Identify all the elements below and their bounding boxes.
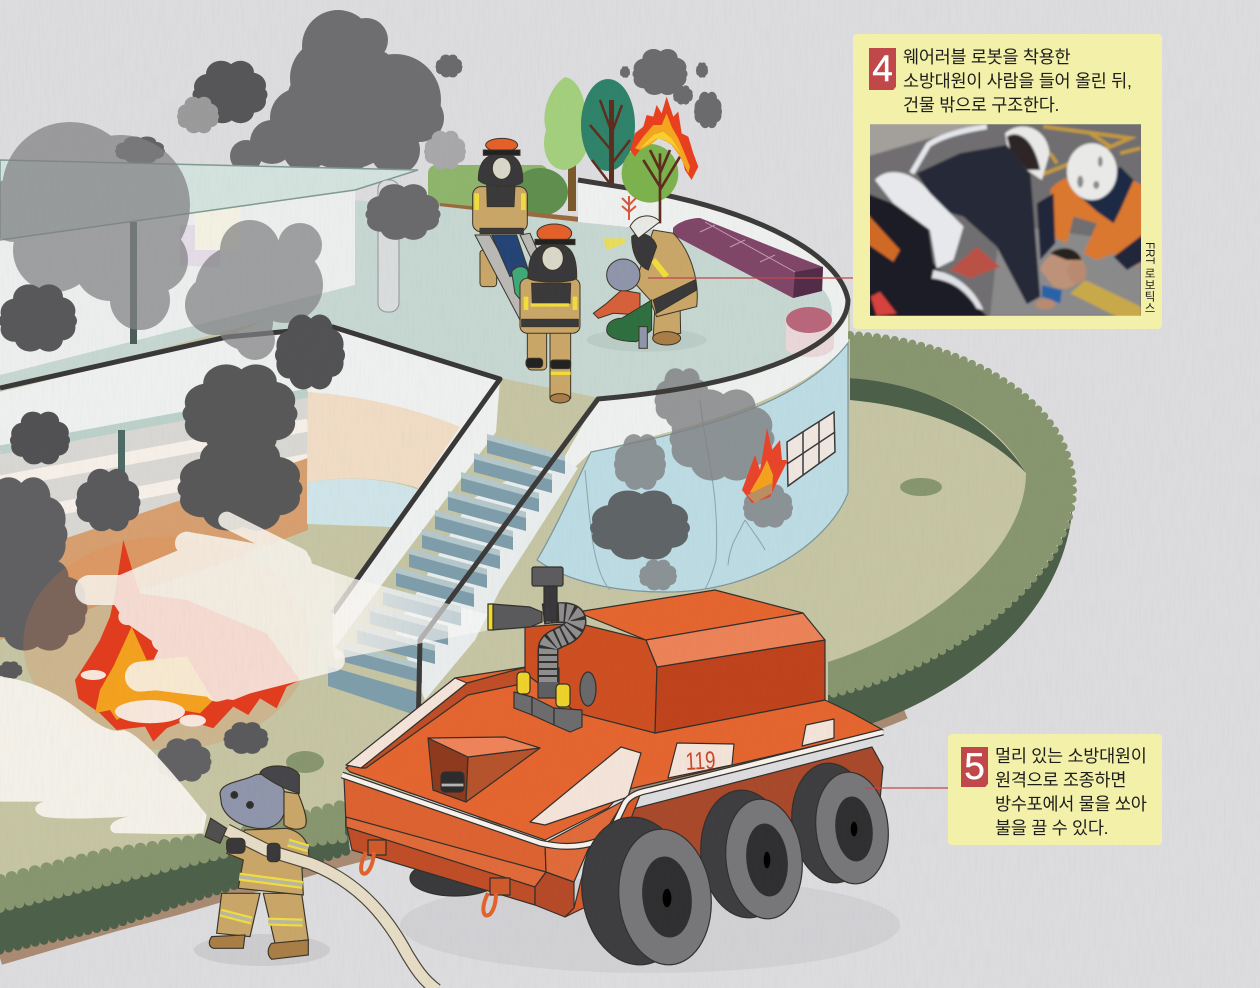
far pavement	[870, 124, 980, 157]
background planting	[428, 165, 640, 232]
exoskeleton waist	[875, 172, 963, 268]
helmet vents	[1077, 156, 1103, 189]
panel: step 5 robot water cannon	[948, 734, 1162, 845]
boots	[209, 935, 245, 948]
lower side panel	[565, 795, 640, 917]
burning tree	[622, 97, 698, 223]
small smoke on lawn	[224, 722, 268, 754]
curb along the road	[0, 712, 905, 958]
corner facet	[535, 872, 574, 917]
lower hedge: dark side	[0, 810, 350, 950]
road shadow under firefighter	[194, 934, 330, 966]
victim	[1040, 250, 1084, 289]
tree: dark green	[581, 79, 635, 218]
ground fire	[23, 537, 310, 750]
main rescuer helmet	[1005, 127, 1050, 180]
smoke over roof back	[115, 137, 165, 163]
rim stroke	[342, 732, 883, 846]
text block 4: 소방대원이 사람을 들어 올린 뒤,	[903, 71, 1132, 91]
coat	[227, 828, 309, 895]
terrace outer rail	[418, 180, 848, 735]
text block 4: 건물 밖으로 구조한다.	[903, 95, 1059, 115]
white wall beside stairs	[333, 385, 498, 650]
lower road	[990, 223, 1141, 316]
nozzle	[205, 818, 227, 843]
ear flap	[284, 792, 306, 829]
interior light stripes	[0, 425, 308, 520]
reflective stripes	[221, 843, 308, 923]
smoke small left	[10, 412, 70, 464]
terrace wall	[540, 180, 848, 500]
stair side wall	[395, 455, 578, 700]
smoke large left edge	[0, 477, 87, 651]
left building	[0, 160, 500, 650]
left leg	[217, 893, 260, 937]
upper floor room	[0, 190, 355, 375]
red stretcher	[950, 247, 1000, 278]
tree trunk	[643, 150, 680, 223]
room cream block	[195, 205, 240, 250]
lidar sensor	[441, 772, 464, 792]
hippo firefighter	[205, 766, 437, 988]
front wheel face	[612, 825, 718, 969]
small white panel	[802, 719, 834, 746]
orange belt	[867, 213, 900, 262]
main rescuer jacket	[917, 145, 1040, 304]
text block 5: 멀리 있는 소방대원이	[995, 746, 1147, 766]
firefighter water jet	[0, 677, 207, 834]
text block 5: 불을 끌 수 있다.	[995, 818, 1108, 838]
text block 5: 원격으로 조종하면	[995, 770, 1126, 790]
underbody wheel	[410, 860, 500, 896]
road	[867, 121, 1144, 319]
hatch top	[428, 737, 540, 757]
rear wheel back	[786, 759, 878, 887]
ring hedge dark far side	[850, 378, 1026, 473]
yellow light left	[517, 672, 530, 694]
smoke far left small	[0, 661, 22, 679]
wall fire	[742, 428, 788, 503]
hippo head	[220, 774, 286, 828]
smoke dark tall upper	[182, 364, 298, 456]
turret stem	[544, 585, 557, 621]
curb yellow	[1070, 280, 1141, 319]
stretcher with patient	[475, 233, 540, 320]
badge 4: 4	[872, 48, 893, 89]
ring hedge outer scallops	[828, 335, 1073, 695]
front wheel hub	[639, 855, 695, 939]
small smoke	[436, 54, 462, 78]
flames orange	[635, 113, 690, 173]
grey disc	[580, 672, 596, 706]
helmet inner	[1007, 134, 1040, 170]
leader line: panel 4	[648, 277, 853, 279]
smoke behind nozzle spray	[156, 738, 212, 782]
dark smoke on wall	[590, 490, 690, 560]
left dark railing	[0, 327, 500, 613]
terrace floor	[227, 200, 838, 398]
lower hedge: top surface	[0, 805, 345, 908]
small red plant	[622, 196, 636, 220]
small bush near firefighter	[286, 751, 324, 773]
turret hose ribs	[543, 612, 576, 682]
smoke on wall	[614, 368, 793, 590]
red exo part	[871, 292, 897, 316]
bumper light band	[346, 817, 546, 887]
room furniture	[180, 225, 220, 268]
road lines	[1037, 127, 1140, 177]
orange floor	[0, 458, 308, 640]
flames red	[630, 97, 698, 180]
nozzle barrel	[492, 604, 542, 630]
119 panel	[668, 743, 734, 778]
stool	[786, 307, 834, 357]
lawn	[0, 300, 1045, 882]
box light strip	[646, 613, 825, 667]
text block 4: 웨어러블 로봇을 착용한	[903, 47, 1070, 67]
glass column	[378, 180, 399, 312]
glass roof	[0, 160, 418, 240]
smoke right of column	[366, 184, 440, 240]
smoke dark cloud	[192, 61, 268, 123]
front wheel axle	[662, 888, 672, 908]
curved blue wall	[537, 343, 848, 592]
rear wheel hub	[833, 795, 875, 863]
firefighter one	[473, 138, 527, 287]
text block 4	[903, 47, 1132, 115]
gloves	[227, 838, 245, 853]
helmet strap	[260, 766, 299, 793]
translucent smoke centre	[185, 220, 323, 360]
rescuer knee	[1037, 193, 1055, 260]
smoke pale puff	[177, 97, 219, 133]
smoke dark tall lower	[178, 439, 302, 531]
turret neck	[538, 668, 559, 698]
tow hook right	[483, 878, 510, 916]
main rescuer lower body	[867, 193, 990, 319]
photo: rescue with wearable robot	[870, 124, 1141, 316]
hose fill	[227, 830, 437, 988]
thin column	[130, 222, 137, 344]
blue arched room	[307, 479, 423, 527]
firefighter three crouching	[603, 216, 697, 345]
rescuer hand	[1035, 299, 1055, 309]
rear wheel face	[810, 769, 894, 887]
smoke dark left	[0, 284, 77, 352]
firefighter two	[520, 224, 580, 403]
room slab	[0, 285, 355, 392]
tree crown	[622, 144, 678, 203]
middle wheel hub	[743, 822, 791, 898]
water blobs	[81, 670, 206, 727]
orange rescuer	[1050, 173, 1144, 267]
lower interior	[0, 392, 308, 560]
text block 5	[995, 746, 1147, 838]
staircase	[328, 434, 565, 716]
box right face	[655, 640, 825, 733]
panel: step 4 wearable robot	[853, 34, 1162, 329]
leader line: panel 5	[865, 787, 948, 789]
ring hedge	[828, 335, 1073, 737]
left trim	[361, 667, 526, 768]
rescuer helmet	[1067, 143, 1117, 200]
badge 5: 5	[964, 746, 985, 787]
hull top	[346, 667, 883, 840]
hatch side	[466, 748, 540, 802]
yellow flames	[95, 627, 213, 720]
robot firefighting vehicle	[342, 567, 894, 970]
exoskeleton arm	[912, 127, 987, 173]
hose in hand	[227, 830, 437, 988]
red flames	[75, 540, 300, 742]
side skirt	[590, 747, 883, 900]
box left face	[525, 623, 657, 733]
stripe centre	[221, 843, 308, 923]
right white stripe	[530, 747, 641, 825]
smoke top cluster	[230, 10, 444, 175]
text block 5: 방수포에서 물을 쏘아	[995, 794, 1147, 814]
bench	[673, 218, 823, 298]
turret hose	[543, 612, 576, 682]
photo credit: FRT 로보틱스	[1143, 242, 1155, 313]
jet beam near robot	[333, 572, 490, 660]
window	[787, 412, 835, 486]
hatch front	[428, 738, 468, 802]
flames yellow	[640, 132, 682, 155]
ring hedge top surface	[828, 335, 1073, 695]
translucent smoke over glass building	[0, 122, 190, 330]
fire glow	[23, 537, 310, 750]
left white stripe	[346, 678, 467, 768]
lower white wall	[0, 327, 500, 450]
front wheel back	[575, 812, 697, 970]
tow hook left	[361, 840, 386, 874]
rescue firefighters group	[473, 138, 707, 403]
nozzle tip	[488, 604, 493, 630]
tree: light green	[544, 77, 589, 211]
box top face	[577, 590, 803, 640]
smoke small middle	[76, 469, 140, 531]
exoskeleton thigh	[932, 270, 983, 310]
hand on head	[1068, 260, 1086, 284]
right leg	[263, 893, 308, 943]
front face	[344, 778, 546, 872]
lower thin column	[118, 430, 125, 490]
small bush on the lawn	[900, 478, 942, 496]
smoke dark centre	[275, 315, 345, 389]
middle wheel axle	[763, 851, 771, 869]
119 number: 119	[685, 746, 716, 776]
middle wheel face	[720, 795, 808, 923]
middle wheel back	[695, 786, 795, 922]
turret camera	[532, 567, 563, 586]
peach wall	[307, 392, 460, 490]
side facet	[545, 800, 625, 882]
wall cracks	[585, 400, 765, 590]
rescuer lower leg	[1114, 233, 1144, 270]
rear wheel axle	[850, 821, 858, 837]
bumper lower	[346, 823, 546, 905]
green slab	[0, 393, 308, 450]
ring hedge dark near side	[828, 495, 1073, 737]
turret base blocks	[514, 692, 582, 732]
rescuer dark vest	[1080, 167, 1134, 223]
jet spray body and fingers	[90, 520, 334, 700]
hippo nostrils	[231, 792, 253, 808]
neck brace	[1042, 285, 1062, 303]
rescued hippo	[593, 259, 652, 348]
smoke above trees	[620, 49, 722, 128]
robot water jet	[81, 520, 490, 727]
floor shadow	[587, 328, 707, 352]
pale smoke right	[424, 131, 466, 169]
road shadow under robot	[400, 877, 900, 973]
victim hair	[1050, 248, 1082, 260]
yellow light right	[556, 684, 570, 707]
rim white	[342, 732, 883, 846]
